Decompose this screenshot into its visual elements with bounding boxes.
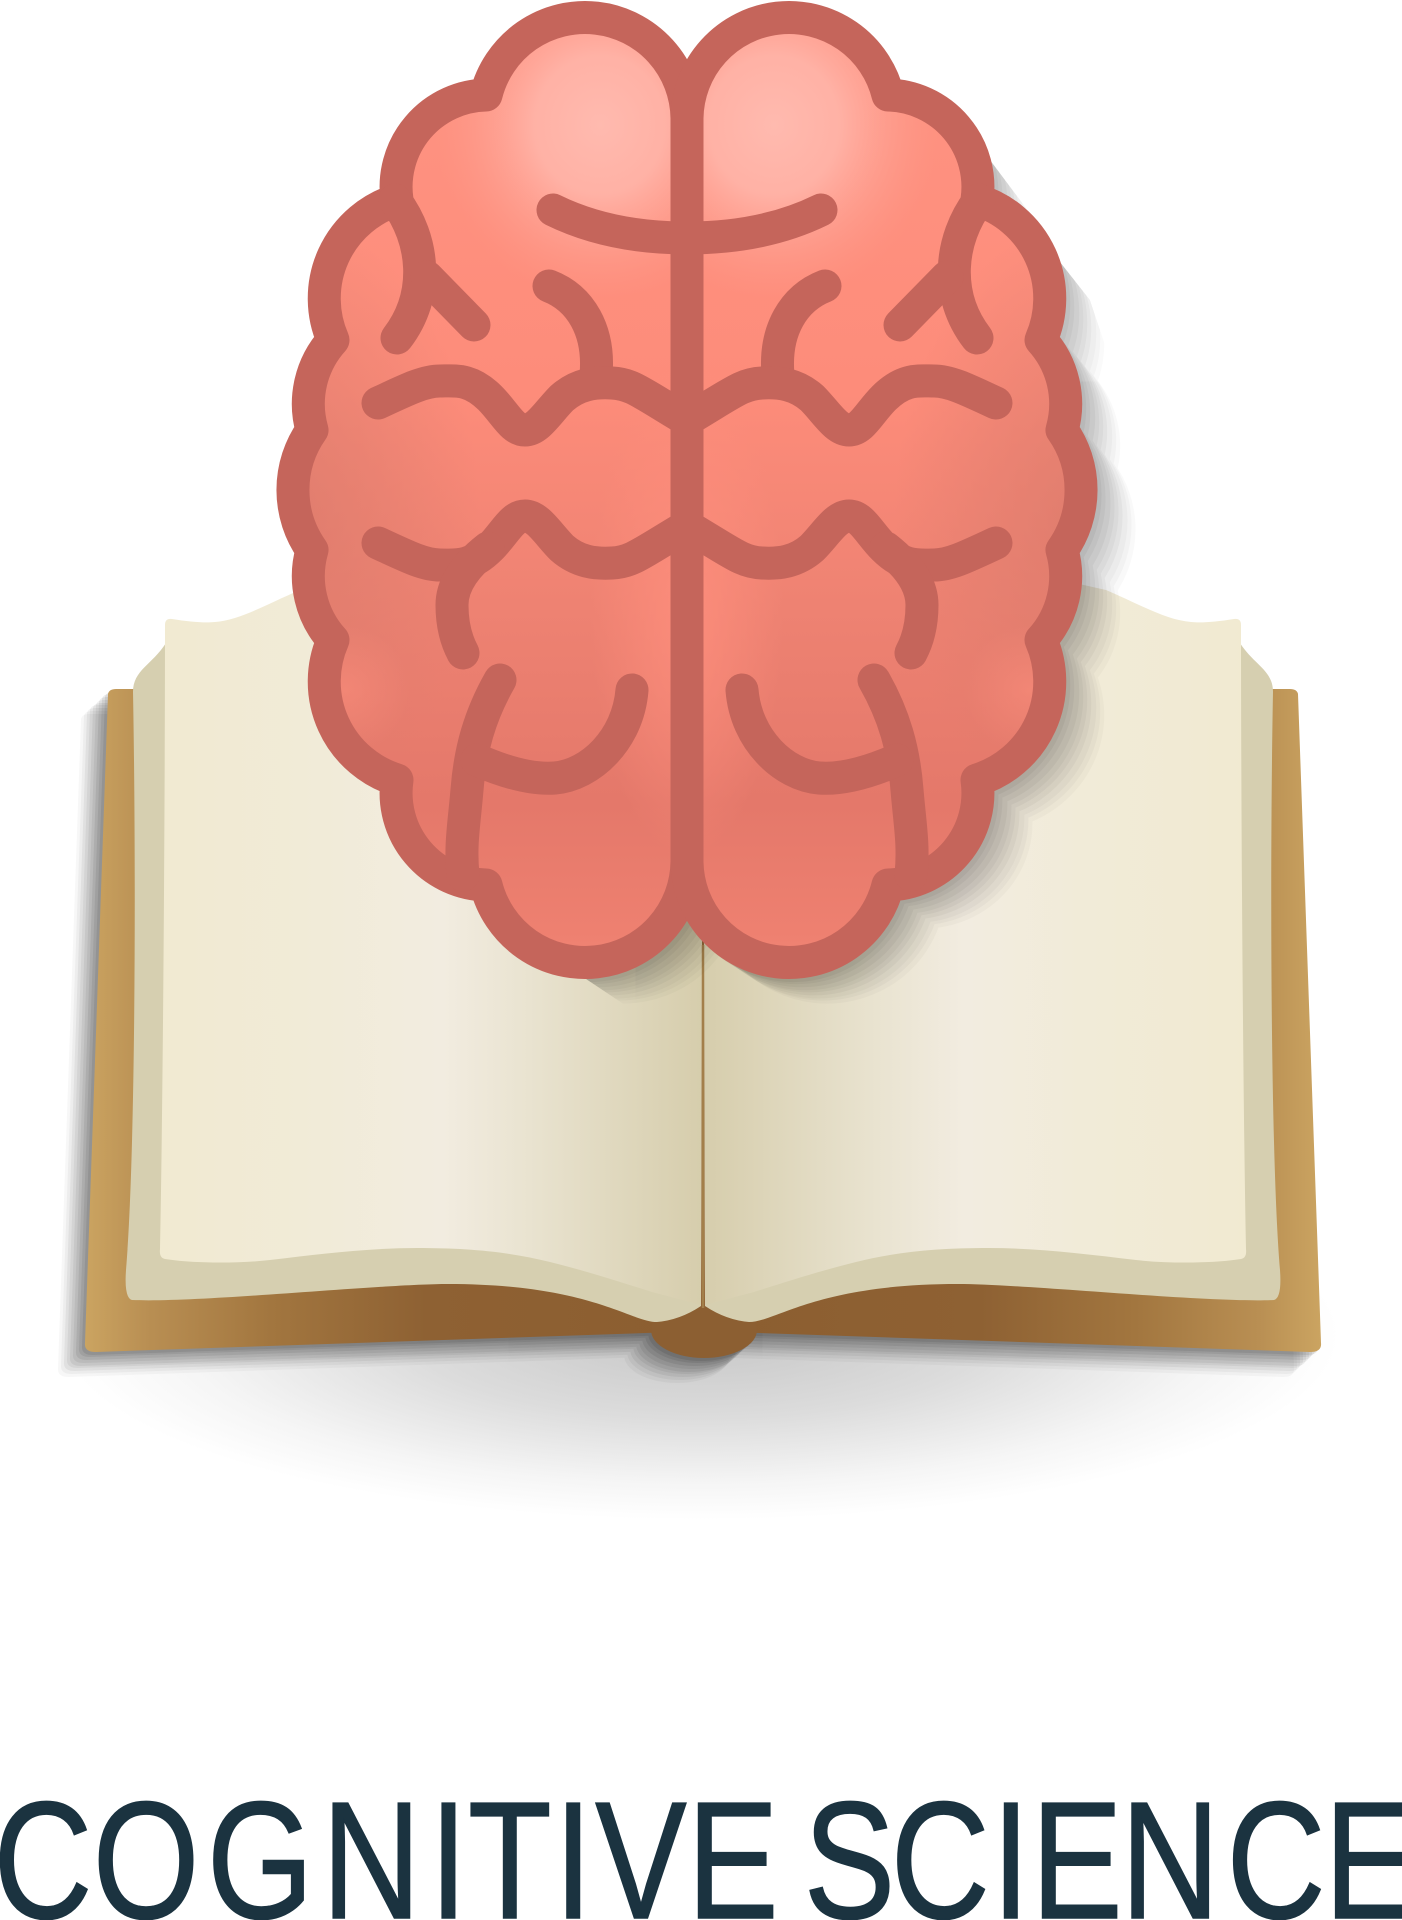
icon: brain — [270, 0, 1104, 980]
ground shadow — [60, 1150, 1340, 1520]
book drop shadow — [58, 692, 1318, 1383]
left pages — [126, 500, 703, 1322]
central fissure — [670, 118, 704, 862]
right pages — [703, 500, 1280, 1322]
book cover — [85, 689, 1321, 1352]
upper and right shadow copies — [586, 162, 1132, 1000]
open book — [85, 500, 1321, 1358]
brain drop shadow — [586, 162, 1132, 1000]
book spine — [651, 1302, 757, 1358]
left hemisphere — [270, 0, 690, 980]
centre page seam — [702, 945, 704, 1308]
right hemisphere — [684, 0, 1104, 980]
